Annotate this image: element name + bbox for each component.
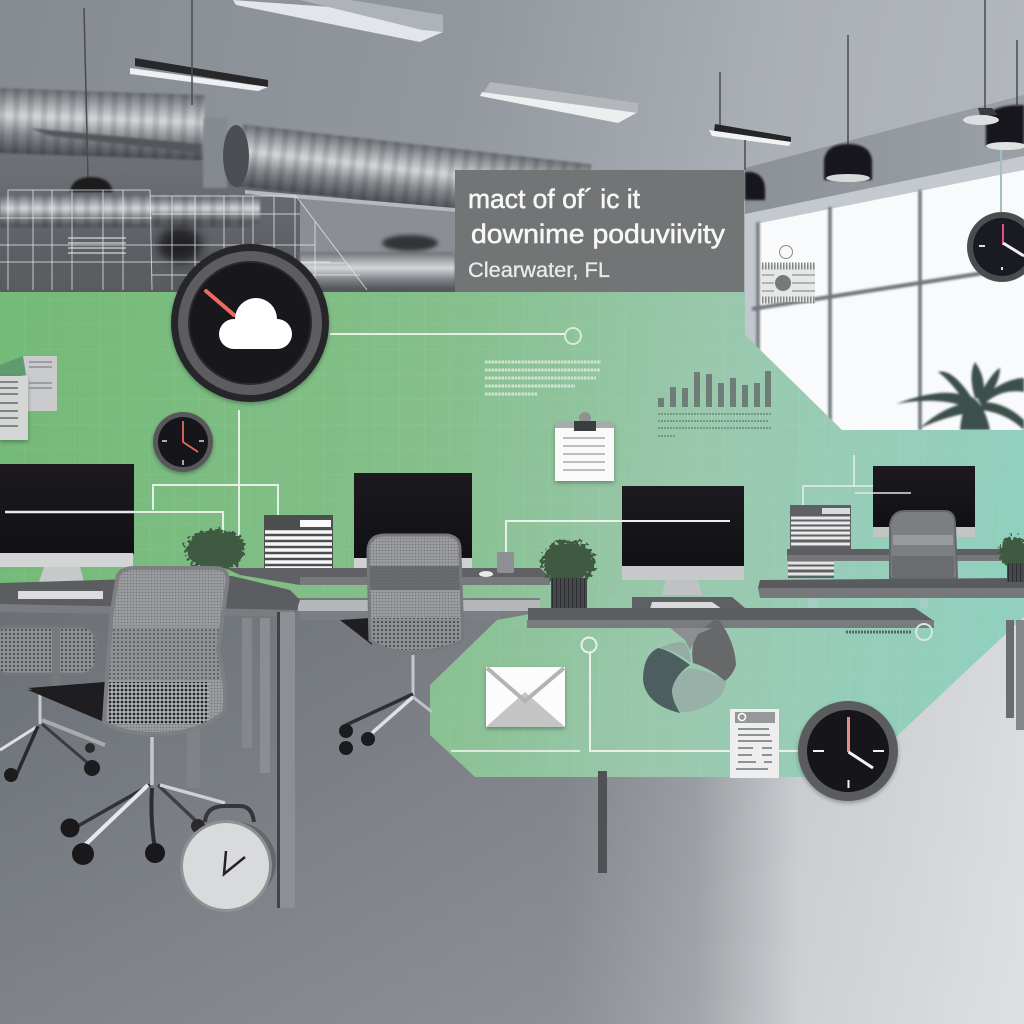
connector lines [4, 328, 873, 751]
icon: documents left [0, 356, 57, 440]
far right monitor [855, 466, 975, 537]
desks [0, 549, 1024, 908]
office ceiling background [0, 0, 1024, 300]
small label and gauge at desk edge [846, 624, 932, 640]
desk: centre back [225, 568, 550, 585]
document stack on desk [264, 515, 333, 573]
icon: envelope [486, 667, 565, 727]
chair: far right [890, 511, 957, 578]
lower duct and blurred machinery [0, 195, 455, 292]
windows [745, 150, 1024, 430]
right centre monitor [510, 486, 744, 595]
title text: downime poduviivity [471, 219, 726, 249]
left monitor [0, 464, 134, 582]
icon: alarm clock on floor [180, 806, 276, 912]
wireframe grid overlay [0, 190, 367, 290]
green infographic panel [0, 292, 1024, 777]
desk: left [0, 576, 300, 908]
title text: mact of of´ ic it [468, 184, 640, 214]
desk: back right [758, 578, 1024, 598]
illegible micro text block [485, 362, 601, 394]
palm plant outside window [896, 362, 1024, 430]
title text [468, 184, 726, 282]
icon: cloud gauge [171, 244, 329, 402]
desk: centre front [527, 597, 934, 628]
document stack right [788, 505, 851, 578]
bar chart [658, 371, 771, 436]
main ventilation duct [223, 125, 591, 226]
icon: clipboard [555, 412, 614, 481]
pie chart [643, 618, 736, 713]
chair: left background [0, 627, 105, 782]
chair: foreground [28, 565, 230, 865]
chart caption marks [658, 414, 771, 436]
icon: small wall clock [153, 412, 213, 472]
icon: badge on window [761, 246, 815, 302]
centre monitor [354, 473, 472, 568]
title block [455, 170, 744, 292]
icon: large clock [798, 701, 898, 801]
desk: far right [787, 549, 1024, 608]
desk legs [598, 620, 1024, 873]
icon: top right clock [967, 212, 1024, 282]
floor [0, 590, 1024, 1024]
icon: report page [730, 709, 779, 778]
left ventilation duct [0, 88, 227, 188]
title text: Clearwater, FL [468, 259, 610, 282]
pendant lamps [70, 0, 1024, 200]
desk plants and cup [185, 529, 1024, 608]
chair: centre [339, 530, 465, 755]
ceiling light panels [130, 0, 791, 146]
